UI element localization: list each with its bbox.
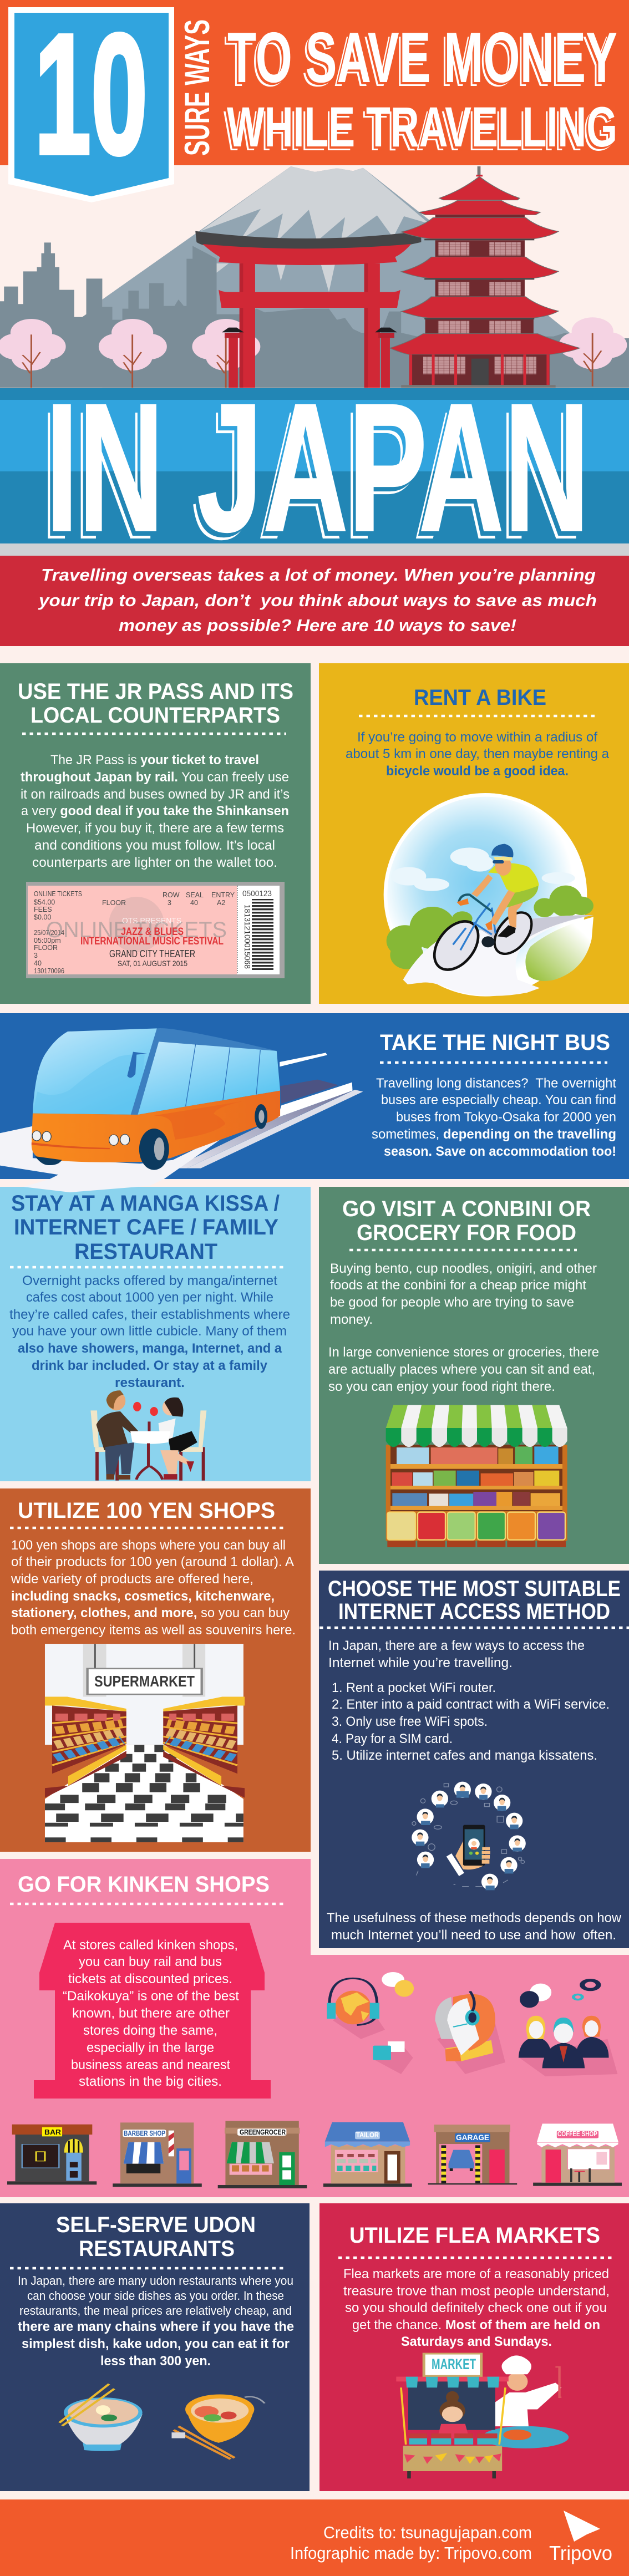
body text: throughout Japan by rail. You can freely use xyxy=(21,770,289,785)
intro banner xyxy=(0,556,629,646)
body text: cafes cost about 1000 yen per night. While xyxy=(26,1290,273,1305)
panel: udon: less than 300 yen. xyxy=(100,2354,211,2369)
body text: also have showers, manga, Internet, and a xyxy=(18,1341,282,1356)
numbered list xyxy=(332,1680,610,1763)
body text: season. Save on accommodation too! xyxy=(384,1144,616,1159)
ticket illustration: 40 xyxy=(34,959,42,967)
body text xyxy=(18,2274,293,2318)
body text: including snacks, cosmetics, kitchenware, xyxy=(11,1589,275,1604)
body text: In Japan, there are many udon restaurants where you xyxy=(18,2274,293,2288)
agents xyxy=(435,1991,495,2061)
body text: about 5 km in one day, then maybe renting a xyxy=(346,746,609,761)
body text: of their products for 100 yen (around 1 dollar). A xyxy=(11,1554,295,1569)
roof and pillar xyxy=(131,1028,277,1115)
ticket illustration: JAZZ & BLUES xyxy=(121,926,184,938)
body text: money. xyxy=(330,1312,373,1327)
panel: conbini xyxy=(319,1187,629,1564)
body text: restaurants, the meal prices are relatively cheap, and xyxy=(19,2304,292,2318)
heading xyxy=(11,1191,280,1264)
ticket illustration: 3 xyxy=(34,952,38,959)
body text: 100 yen shops are shops where you can buy all xyxy=(11,1538,286,1553)
ticket illustration: A2 xyxy=(217,899,225,907)
ticket illustration: 3 xyxy=(168,899,171,907)
body text xyxy=(21,753,290,870)
intro banner: your trip to Japan, don’t you think about ways to save as much xyxy=(38,591,597,610)
panel: udon: there are many chains where if you have the xyxy=(18,2319,294,2334)
goods top shelf xyxy=(397,1446,559,1465)
body text: The JR Pass is your ticket to travel xyxy=(50,753,259,768)
goods bottom shelf xyxy=(392,1492,560,1507)
mirror xyxy=(127,1052,147,1078)
hand xyxy=(455,1832,484,1869)
badge: 10: 10 xyxy=(34,0,148,190)
heading: UTILIZE FLEA MARKETS xyxy=(349,2223,600,2248)
ticket illustration: INTERNATIONAL MUSIC FESTIVAL xyxy=(80,936,224,947)
numbered list: 2. Enter into a paid contract with a WiFi service. xyxy=(332,1697,610,1712)
heading: INTERNET CAFE / FAMILY xyxy=(14,1215,278,1239)
credits: Credits to: tsunagujapan.com xyxy=(323,2523,532,2542)
ticket illustration: FLOOR xyxy=(34,944,58,952)
phone xyxy=(463,1825,485,1866)
shop: barber shop: BARBER SHOP xyxy=(124,2129,165,2137)
shop: tailor xyxy=(323,2122,412,2187)
closing text: much Internet you’ll need to use and how often. xyxy=(331,1928,616,1943)
heading: GO VISIT A CONBINI OR xyxy=(342,1197,591,1221)
ticket illustration xyxy=(26,882,285,978)
store-shaped callout xyxy=(34,1923,271,2099)
ticket illustration: SEAL xyxy=(186,891,204,899)
intro banner: money as possible? Here are 10 ways to save! xyxy=(119,616,516,635)
goods middle shelf xyxy=(392,1471,559,1486)
shop: greengrocer: GREENGROCER xyxy=(240,2128,286,2136)
crates xyxy=(409,2436,498,2441)
body text: a very good deal if you take the Shinkansen xyxy=(21,804,289,819)
store-shaped callout: known, but there are other xyxy=(72,2006,230,2021)
ticket illustration: 0500123 xyxy=(242,890,272,898)
store-shaped callout: you can buy rail and bus xyxy=(79,1954,222,1969)
panel: flea markets xyxy=(319,2203,629,2491)
heading: USE THE JR PASS AND ITS xyxy=(18,679,293,704)
body text: Overnight packs offered by manga/internet xyxy=(22,1273,277,1288)
heading xyxy=(342,1197,591,1245)
body text: foods at the conbini for a cheap price might xyxy=(330,1278,586,1293)
store-shaped callout: At stores called kinken shops, xyxy=(63,1938,238,1953)
ticket illustration: 25/07/2014 xyxy=(34,929,64,937)
body text: they’re called cafes, their establishments where xyxy=(9,1307,290,1322)
panel: rent a bike xyxy=(319,663,629,1004)
body text: so you can enjoy your food right there. xyxy=(328,1379,555,1394)
body text: so you should definitely check one out if you xyxy=(345,2300,607,2315)
ticket illustration: $54.00 xyxy=(34,898,55,906)
ticket illustration: 40 xyxy=(190,899,198,907)
body text: can choose your side dishes as you order. In these xyxy=(27,2289,284,2303)
pagoda xyxy=(390,166,580,388)
badge: 10 xyxy=(8,0,174,202)
heading: LOCAL COUNTERPARTS xyxy=(31,703,280,728)
body text: are actually places where you can sit and eat, xyxy=(328,1362,595,1377)
store-shaped callout: business areas and nearest xyxy=(71,2057,230,2072)
body text: bicycle would be a good idea. xyxy=(386,764,569,779)
body text: both emergency items as well as souvenirs here. xyxy=(11,1623,296,1638)
body text: In Japan, there are a few ways to access the xyxy=(328,1638,585,1653)
heading: UTILIZE 100 YEN SHOPS xyxy=(18,1498,275,1523)
closing text xyxy=(327,1911,621,1943)
wheels xyxy=(35,1104,267,1170)
bowl 1 xyxy=(59,2384,143,2451)
torii gate xyxy=(195,231,421,388)
scene: Mount Fuji, city, torii gate and pagoda xyxy=(0,166,629,388)
shop: bar: BAR xyxy=(44,2128,62,2136)
avatars xyxy=(412,1782,526,1890)
illustration: market stall and chef xyxy=(396,2354,569,2478)
mountain snow cap xyxy=(201,166,429,292)
IN JAPAN band xyxy=(0,365,629,577)
city skyline xyxy=(0,242,629,388)
body text: counterparts are lighter on the wallet too. xyxy=(32,855,277,870)
body text: If you’re going to move within a radius of xyxy=(357,730,597,745)
headlights xyxy=(32,1131,130,1145)
body text: buses are especially cheap. You can find xyxy=(381,1093,616,1107)
side windows xyxy=(138,1041,280,1115)
body text: wide variety of products are offered here, xyxy=(11,1572,253,1587)
body text: Buying bento, cup noodles, onigiri, and other xyxy=(330,1261,597,1276)
illustration: grocery stall xyxy=(386,1405,567,1547)
wallet xyxy=(388,2041,405,2052)
shop: garage xyxy=(428,2125,517,2184)
panel: kinken shops xyxy=(0,1859,629,2197)
panel: JR pass xyxy=(0,663,311,1004)
ticket illustration: SAT, 01 AUGUST 2015 xyxy=(118,959,187,968)
ticket illustration: ONLINE TICKETS xyxy=(46,918,227,942)
windscreen xyxy=(33,1028,157,1115)
awning xyxy=(396,2377,509,2381)
bike xyxy=(425,895,539,978)
numbered list: 4. Pay for a SIM card. xyxy=(332,1731,453,1746)
store-shaped callout: tickets at discounted prices. xyxy=(68,1972,232,1986)
table xyxy=(130,1431,170,1444)
ticket illustration: 05:00pm xyxy=(34,937,61,944)
credits: Infographic made by: Tripovo.com xyxy=(290,2543,532,2563)
body text xyxy=(11,1538,296,1638)
cherry blossom trees xyxy=(0,317,627,388)
icon shadows xyxy=(333,1997,617,2076)
shop: coffee shop: COFFEE SHOP xyxy=(557,2130,597,2138)
bowl 2 xyxy=(171,2394,265,2459)
numbered list: 5. Utilize internet cafes and manga kissatens. xyxy=(332,1748,597,1763)
ticket illustration: ROW xyxy=(163,891,180,899)
orange body xyxy=(32,1091,280,1162)
heading: RENT A BIKE xyxy=(414,685,546,710)
chef xyxy=(482,2426,569,2448)
shop: bar xyxy=(7,2125,97,2184)
small grey icons xyxy=(412,1784,524,1887)
closing text: The usefulness of these methods depends on how xyxy=(327,1911,621,1925)
body text: be good for people who are trying to save xyxy=(330,1295,574,1310)
road xyxy=(0,1053,363,1192)
body text: Travelling long distances? The overnight xyxy=(376,1076,616,1091)
logo: wordmark: Tripovo xyxy=(549,2542,612,2564)
ticket illustration: GRAND CITY THEATER xyxy=(109,948,195,959)
numbered list: 1. Rent a pocket WiFi router. xyxy=(332,1680,496,1695)
clouds xyxy=(391,847,575,891)
shop: tailor: TAILOR xyxy=(356,2131,379,2139)
body text xyxy=(346,730,609,779)
body text: it on railroads and buses owned by JR and it’s xyxy=(21,787,290,802)
header orange band xyxy=(0,0,629,165)
ticket illustration: FEES xyxy=(34,906,52,913)
woman xyxy=(163,1399,179,1416)
store-shaped callout: “Daikokuya” is one of the best xyxy=(63,1989,239,2004)
shop: coffee shop xyxy=(533,2123,622,2186)
illustration: supermarket aisle: SUPERMARKET xyxy=(94,1673,195,1690)
illustration: phone with avatars xyxy=(412,1782,526,1890)
panel: udon xyxy=(0,2203,310,2491)
team xyxy=(519,2016,609,2068)
store-shaped callout: stores doing the same, xyxy=(83,2023,217,2038)
panel: udon: simplest dish, kake udon, you can eat it for xyxy=(22,2336,290,2351)
road xyxy=(403,915,594,996)
market sign xyxy=(424,2354,481,2376)
heading xyxy=(56,2213,256,2261)
man xyxy=(107,1391,125,1410)
glasses xyxy=(133,1402,141,1411)
body text: drink bar included. Or stay at a family xyxy=(32,1358,267,1373)
body text: stationery, clothes, and more, so you can buy xyxy=(11,1605,290,1620)
right shelf xyxy=(163,1696,245,1798)
ticket illustration: 130170096 xyxy=(34,967,64,975)
body text: Flea markets are more of a reasonably priced xyxy=(343,2267,609,2282)
rider xyxy=(508,898,524,928)
body text: treasure trove than most people understand, xyxy=(343,2284,610,2299)
ticket illustration: 181312100015068 xyxy=(242,905,251,969)
body text: you have your own little cubicle. Many of them xyxy=(12,1324,287,1339)
gears and bubbles xyxy=(520,1980,598,2008)
illustration: support and people icons xyxy=(327,1972,617,2076)
logo: paper plane xyxy=(564,2511,600,2542)
ticket illustration: $0.00 xyxy=(34,913,51,921)
intro banner: Travelling overseas takes a lot of money. When you’re planning xyxy=(41,565,596,585)
illustration: couple at a table xyxy=(90,1390,206,1481)
bushes xyxy=(387,886,594,969)
heading: RESTAURANTS xyxy=(79,2237,235,2261)
awning xyxy=(386,1405,567,1447)
body text: In large convenience stores or groceries, there xyxy=(328,1345,599,1360)
left shelf xyxy=(45,1696,126,1798)
body text: Internet while you’re travelling. xyxy=(328,1655,513,1670)
store-shaped callout: especially in the large xyxy=(87,2040,214,2055)
heading: STAY AT A MANGA KISSA / xyxy=(11,1191,280,1216)
shop: greengrocer xyxy=(218,2121,307,2188)
illustration: cyclist xyxy=(384,793,594,997)
heading xyxy=(328,1577,621,1624)
illustration: supermarket aisle xyxy=(45,1644,245,1842)
produce crates xyxy=(387,1512,565,1540)
panel: manga kissa xyxy=(0,1187,311,1481)
ticket illustration: OTS PRESENTS xyxy=(122,916,181,926)
heading: RESTAURANT xyxy=(74,1239,217,1264)
body text: get the chance. Most of them are held on xyxy=(352,2318,600,2333)
body text xyxy=(343,2267,610,2349)
mountain xyxy=(102,166,570,388)
body text: buses from Tokyo-Osaka for 2000 yen xyxy=(396,1110,616,1125)
body text xyxy=(9,1273,290,1390)
heading xyxy=(18,679,293,728)
store-shaped callout: stations in the big cities. xyxy=(79,2074,222,2089)
heading: GO FOR KINKEN SHOPS xyxy=(18,1872,270,1897)
body text: restaurant. xyxy=(115,1375,185,1390)
footer xyxy=(0,2499,629,2576)
panel: night bus xyxy=(0,1013,629,1192)
ticket illustration: FLOOR xyxy=(102,899,126,907)
heading: TAKE THE NIGHT BUS xyxy=(380,1030,610,1055)
shop: barber shop xyxy=(113,2122,202,2187)
illustration: noodle bowls xyxy=(59,2384,265,2459)
body text: Saturdays and Sundays. xyxy=(401,2334,552,2349)
body text xyxy=(372,1076,616,1159)
checker floor xyxy=(45,1749,244,1840)
chat bubbles xyxy=(382,1972,404,1987)
globe with headset xyxy=(327,1978,379,2025)
numbered list: 3. Only use free WiFi spots. xyxy=(332,1714,488,1729)
panel: 100 yen shops xyxy=(0,1488,311,1852)
curtain xyxy=(408,2381,495,2430)
ticket illustration: ENTRY xyxy=(211,891,235,899)
body text xyxy=(328,1638,585,1670)
body text: sometimes, depending on the travelling xyxy=(372,1127,616,1142)
body text: and conditions you must follow. It’s local xyxy=(34,838,275,853)
heading: GROCERY FOR FOOD xyxy=(357,1221,576,1245)
counter xyxy=(403,2446,502,2471)
panel: internet access xyxy=(319,1571,629,1948)
chairs xyxy=(95,1447,205,1481)
illustration: bus on the road xyxy=(0,1028,363,1192)
ticket illustration: ONLINE TICKETS xyxy=(34,890,82,898)
shop: garage: GARAGE xyxy=(456,2133,489,2142)
illustration: market stall and chef: MARKET xyxy=(432,2356,476,2372)
vendor xyxy=(439,2400,465,2421)
heading: SELF-SERVE UDON xyxy=(56,2213,256,2237)
credits xyxy=(290,2523,532,2563)
body text: However, if you buy it, there are a few terms xyxy=(26,821,284,836)
body text xyxy=(328,1261,599,1394)
